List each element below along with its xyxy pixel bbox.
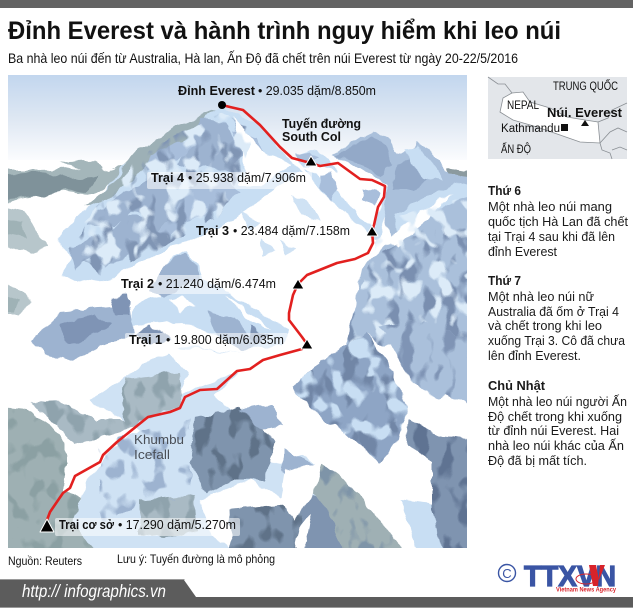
label: camp 4 bbox=[151, 172, 306, 184]
climbing route line bbox=[47, 105, 385, 520]
footer band bbox=[0, 579, 633, 608]
text block: Sunday: Một nhà leo núi người Ấn bbox=[488, 394, 627, 409]
text block: Saturday: và chết trong khi leo bbox=[488, 318, 602, 333]
label: summit: • 29.035 dặm/8.850m bbox=[258, 83, 376, 98]
panel: locator map: Kathmandu bbox=[501, 123, 560, 135]
lower ridge with Trại 2 mound bbox=[30, 250, 290, 362]
label: camp 4: • 25.938 dặm/7.906m bbox=[188, 170, 306, 185]
label: camp 3: Trại 3 bbox=[196, 223, 229, 238]
text block: Sunday: Chủ Nhật bbox=[488, 378, 546, 393]
text block: Saturday: Một nhà leo núi nữ bbox=[488, 289, 594, 304]
label: camp 1 bbox=[129, 334, 284, 346]
text block: Friday bbox=[488, 183, 628, 259]
text block: Friday: Thứ 6 bbox=[488, 183, 521, 198]
label: base camp: • 17.290 dặm/5.270m bbox=[118, 517, 236, 532]
top bar bbox=[0, 0, 633, 8]
label: camp 2 bbox=[121, 278, 276, 290]
text block: Sunday: Độ đã bị mất tích. bbox=[488, 453, 587, 468]
label: camp 2: Trại 2 bbox=[121, 276, 154, 291]
right face bbox=[292, 320, 467, 548]
label: South Col route bbox=[282, 118, 360, 141]
label: camp 4: Trại 4 bbox=[151, 170, 185, 185]
panel: locator map: ẤN ĐỘ bbox=[501, 143, 531, 156]
bottom centre rock bbox=[281, 464, 402, 548]
text block: Sunday: nhà leo núi khác của Ấn bbox=[488, 438, 624, 453]
subtitle: Ba nhà leo núi đến từ Australia, Hà lan, Ấn Độ đã chết trên núi Everest từ ngày 20-22/5/2016 bbox=[8, 50, 518, 66]
text block: Saturday: lên đỉnh Everest. bbox=[488, 348, 581, 363]
label: base camp bbox=[59, 519, 236, 532]
logo: TTXVN: TTXVN bbox=[524, 561, 616, 593]
summit marker bbox=[218, 101, 226, 109]
logo: TTXVN: Vietnam News Agency bbox=[556, 586, 616, 594]
text block: Sunday bbox=[488, 378, 627, 468]
label: camp 2: • 21.240 dặm/6.474m bbox=[158, 276, 276, 291]
label: camp 3: • 23.484 dặm/7.158m bbox=[233, 223, 350, 238]
Lhotse and right ridges bbox=[332, 132, 467, 346]
text block: Sunday: Độ chết trong khi xuống bbox=[488, 409, 622, 424]
label: South Col route: South Col bbox=[282, 129, 341, 144]
source note: Nguồn: Reuters bbox=[8, 554, 82, 568]
camp markers bbox=[40, 156, 378, 532]
text block: Sunday: từ đỉnh núi Everest. Hai bbox=[488, 423, 619, 438]
panel: locator map: NEPAL bbox=[507, 100, 540, 112]
title: Đỉnh Everest và hành trình nguy hiểm khi leo núi bbox=[8, 17, 561, 45]
label: camp 3 bbox=[196, 226, 350, 238]
borders bbox=[488, 77, 627, 159]
label: South Col route: Tuyến đường bbox=[282, 116, 361, 131]
label: camp 1: Trại 1 bbox=[129, 332, 162, 347]
text block: Saturday bbox=[488, 273, 626, 363]
logo: TTXVN: C bbox=[502, 566, 512, 581]
text block: Friday: quốc tịch Hà Lan đã chết bbox=[488, 214, 628, 229]
Everest marker bbox=[581, 120, 589, 126]
locator background bbox=[488, 77, 627, 159]
Nepal shape bbox=[500, 92, 600, 143]
text block: Friday: đỉnh Everest bbox=[488, 244, 557, 259]
Khumbu icefall slopes bbox=[30, 345, 330, 560]
label: Khumbu Icefall bbox=[135, 434, 184, 459]
sky bbox=[8, 75, 467, 154]
text block: Friday: Một nhà leo núi mang bbox=[488, 199, 612, 214]
website url: http:// infographics.vn bbox=[22, 581, 166, 601]
label: base camp: Trại cơ sở bbox=[59, 517, 115, 532]
left distant ridge bbox=[8, 159, 129, 316]
label: Khumbu Icefall: Khumbu bbox=[134, 433, 184, 447]
text block: Saturday: Australia đã ốm ở Trại 4 bbox=[488, 304, 619, 319]
panel: locator map: Núi. Everest bbox=[547, 106, 623, 120]
bottom-left rock bbox=[8, 408, 94, 548]
text block: Saturday: Thứ 7 bbox=[488, 273, 521, 288]
text block: Friday: tại Trại 4 sau khi đã lên bbox=[488, 229, 615, 244]
mountain illustration bbox=[0, 106, 485, 560]
panel: Everest route map bbox=[0, 75, 485, 560]
Everest pyramid bbox=[56, 106, 302, 282]
label backgrounds bbox=[55, 172, 312, 536]
south col and snow patches bbox=[240, 150, 390, 256]
route note: Lưu ý: Tuyến đường là mô phỏng bbox=[117, 552, 275, 566]
label: summit: Đỉnh Everest bbox=[178, 83, 256, 98]
label: Khumbu Icefall: Icefall bbox=[134, 448, 170, 462]
label: camp 1: • 19.800 dặm/6.035m bbox=[166, 332, 284, 347]
locator labels: TRUNG QUỐC bbox=[553, 79, 618, 93]
text block: Saturday: xuống Trại 3. Cô đã chưa bbox=[488, 333, 626, 348]
panel: locator map bbox=[488, 77, 627, 159]
label: summit bbox=[178, 86, 376, 97]
snow base bbox=[8, 160, 467, 548]
Kathmandu marker bbox=[561, 124, 568, 131]
